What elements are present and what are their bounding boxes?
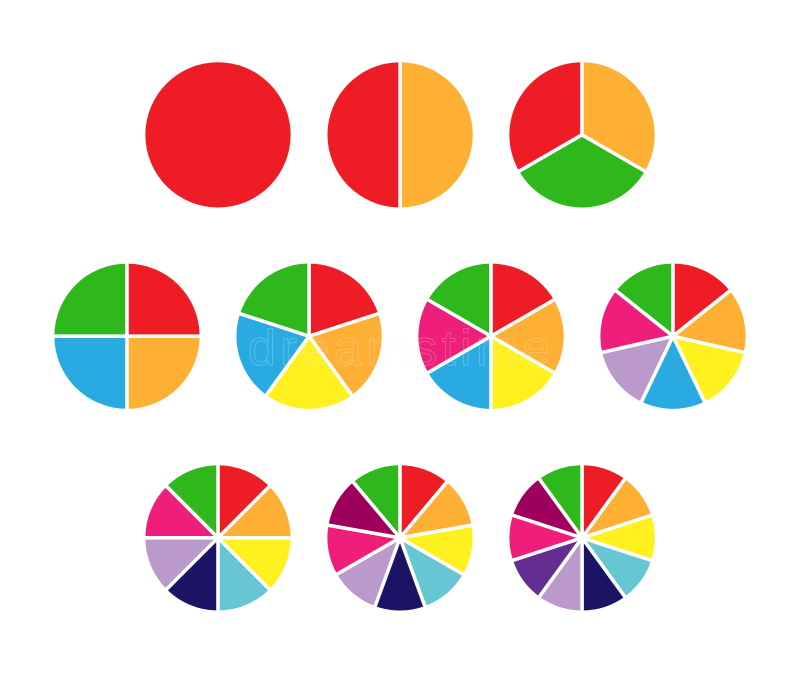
pie: 5 slices [211,248,400,436]
pie: 8 slices [130,450,306,626]
pie: 2 slices [327,61,473,208]
pie: 3 slices [483,54,655,234]
pie: 4 slices [53,263,201,410]
pie: 7 slices [590,247,765,426]
watermark text: dreamstime [248,320,550,376]
pie: 10 slices [500,454,664,622]
pie: 9 slices [314,452,482,622]
pie: 1 slice [145,62,291,207]
pie: 6 slices [397,245,585,427]
